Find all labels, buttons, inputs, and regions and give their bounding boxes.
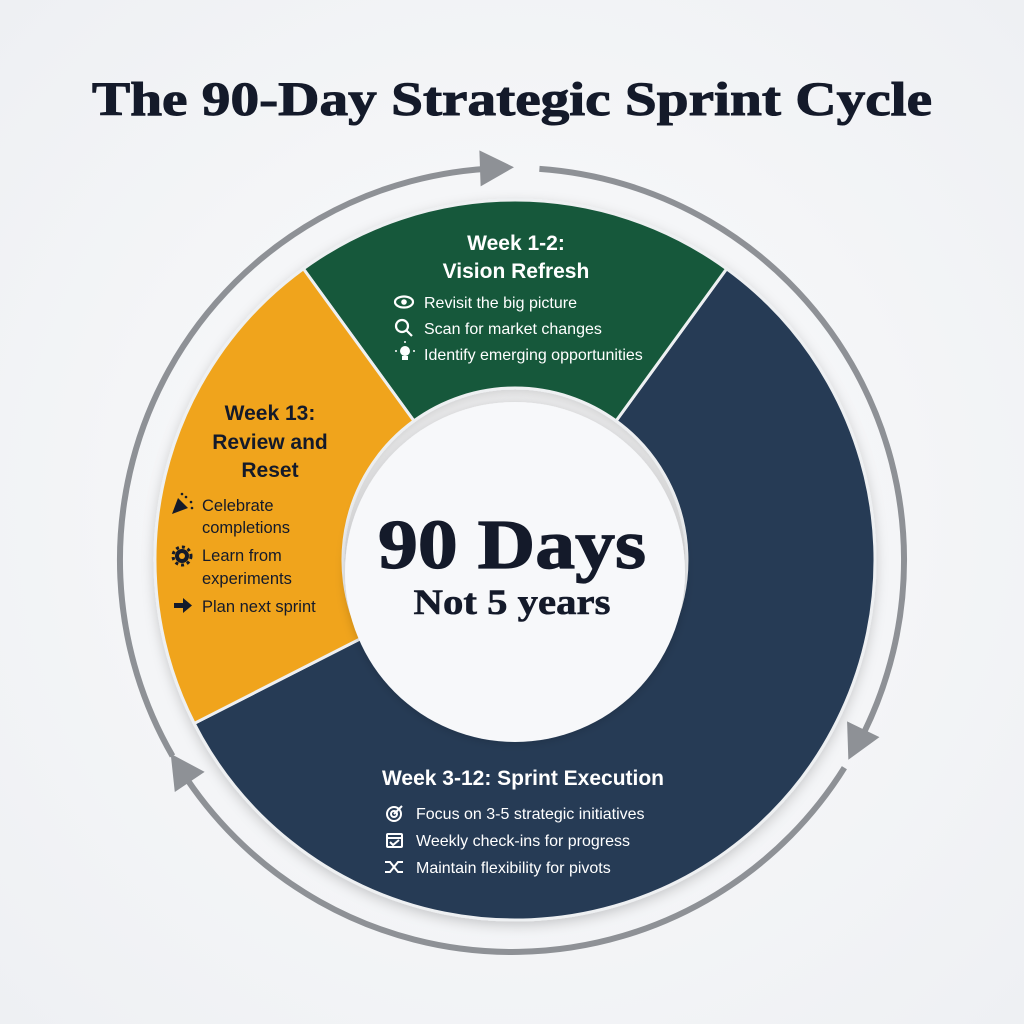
icon: shuffle xyxy=(385,862,403,872)
segment: review and reset xyxy=(155,269,414,723)
icon: calendar xyxy=(387,834,402,847)
icon: party popper xyxy=(172,493,193,514)
panel: review and reset text: Week 13: xyxy=(225,402,315,425)
panel: vision refresh text: Identify emerging opportunities xyxy=(424,347,643,364)
icon: target xyxy=(387,806,402,821)
panel: sprint execution text: Weekly check-ins for progress xyxy=(416,833,630,850)
panel: review and reset text: experiments xyxy=(202,570,292,588)
panel: vision refresh text: Scan for market changes xyxy=(424,321,602,338)
panel: review and reset text: Celebrate xyxy=(202,497,274,515)
panel: review and reset text: Plan next sprint xyxy=(202,598,316,616)
panel: sprint execution text xyxy=(382,767,664,877)
panel: vision refresh text: Revisit the big picture xyxy=(424,295,577,312)
panel: vision refresh text: Week 1-2: xyxy=(467,232,565,255)
panel: review and reset text xyxy=(172,402,328,616)
segment: vision refresh xyxy=(303,200,727,421)
panel: review and reset text: Reset xyxy=(241,459,299,482)
icon: gear xyxy=(173,547,191,565)
segment: sprint execution xyxy=(194,269,875,920)
panel: vision refresh text: Vision Refresh xyxy=(443,260,589,283)
panel: review and reset text: Learn from xyxy=(202,547,282,565)
cycle arrows ring xyxy=(120,149,904,952)
panel: review and reset text: completions xyxy=(202,519,290,537)
icon: eye xyxy=(395,296,413,308)
panel: sprint execution text: Week 3-12: Sprint Execution xyxy=(382,767,664,790)
panel: sprint execution text: Maintain flexibility for pivots xyxy=(416,860,611,877)
panel: review and reset text: Review and xyxy=(212,431,328,454)
icon: magnifier xyxy=(396,320,412,336)
center text: Not 5 years xyxy=(414,582,610,622)
title: The 90-Day Strategic Sprint Cycle xyxy=(92,73,932,126)
icon: arrow right xyxy=(174,598,192,613)
icon: bulb xyxy=(395,341,415,360)
donut chart xyxy=(155,200,875,920)
center text: 90 Days xyxy=(378,507,646,584)
panel: sprint execution text: Focus on 3-5 strategic initiatives xyxy=(416,806,645,823)
panel: vision refresh text xyxy=(395,232,643,364)
center text xyxy=(378,507,646,622)
center circle xyxy=(345,402,685,742)
